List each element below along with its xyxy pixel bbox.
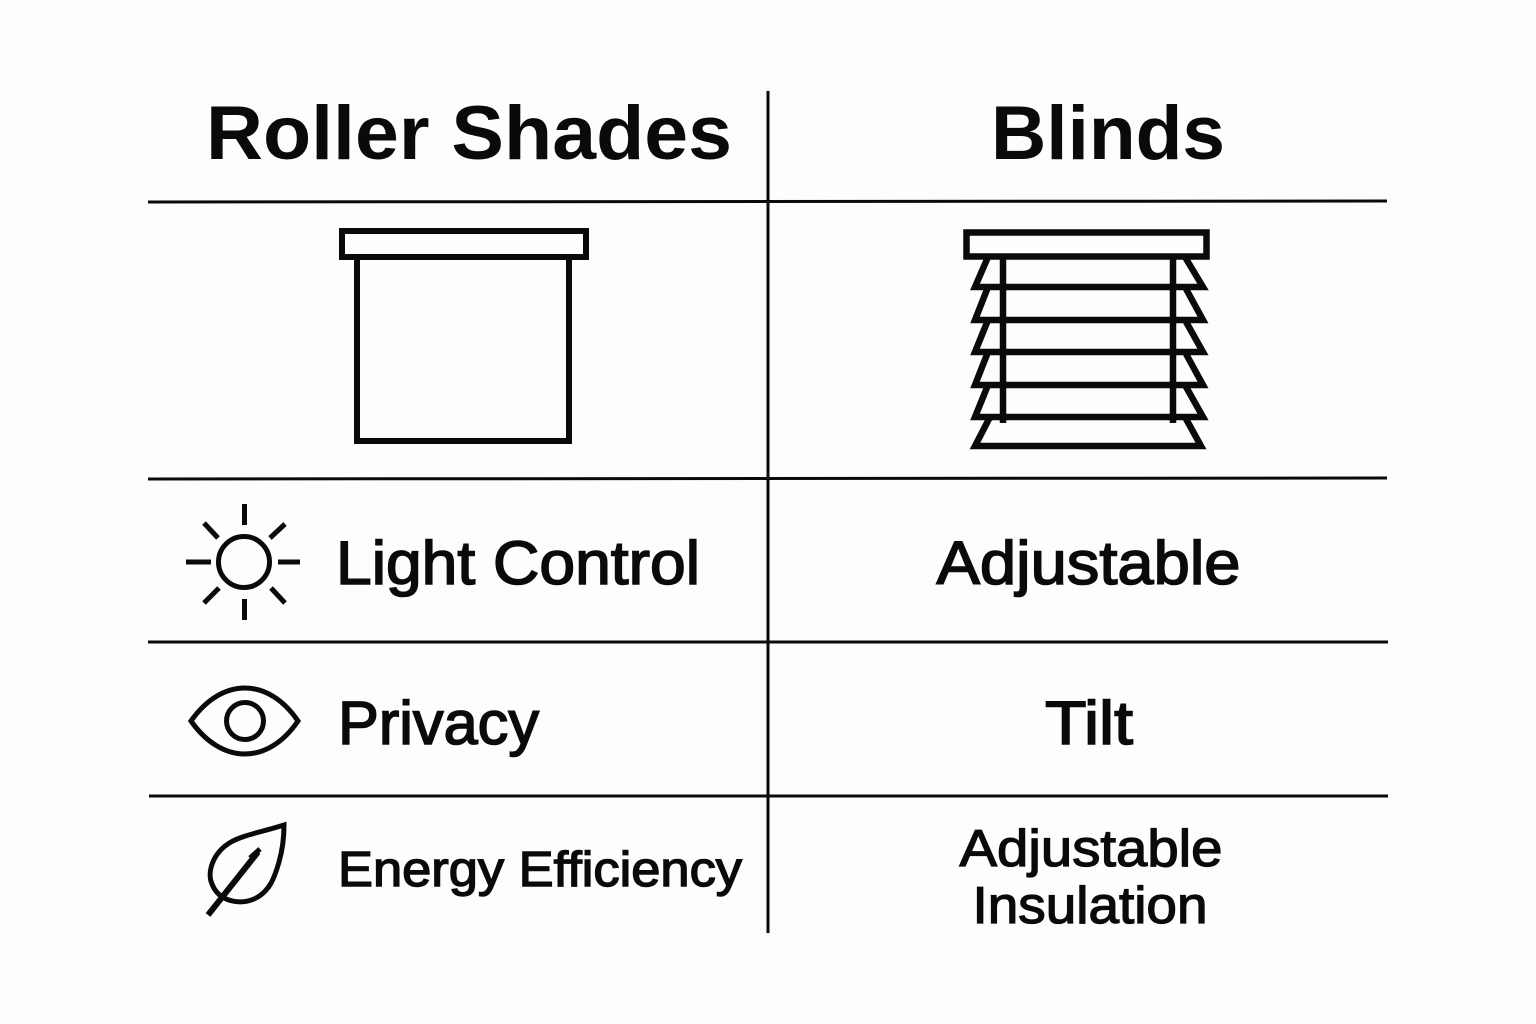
value: Adjustable: Adjustable [936, 529, 1240, 597]
heading: Roller Shades: Roller Shades [206, 91, 732, 176]
icon: leaf [208, 825, 284, 915]
icon: roller shade [342, 231, 586, 441]
value: Adjustable Insulation: Insulation [972, 877, 1208, 935]
icon: eye [191, 688, 298, 754]
label: Energy Efficiency: Energy Efficiency [338, 843, 743, 897]
icon: sun [186, 504, 300, 620]
label: Light Control: Light Control [336, 529, 700, 597]
value: Tilt: Tilt [1045, 689, 1133, 757]
value: Adjustable Insulation: Adjustable [960, 820, 1222, 878]
heading: Blinds: Blinds [991, 91, 1225, 176]
icon: blinds [966, 232, 1206, 446]
value: Adjustable Insulation [960, 820, 1222, 935]
label: Privacy: Privacy [338, 689, 539, 757]
